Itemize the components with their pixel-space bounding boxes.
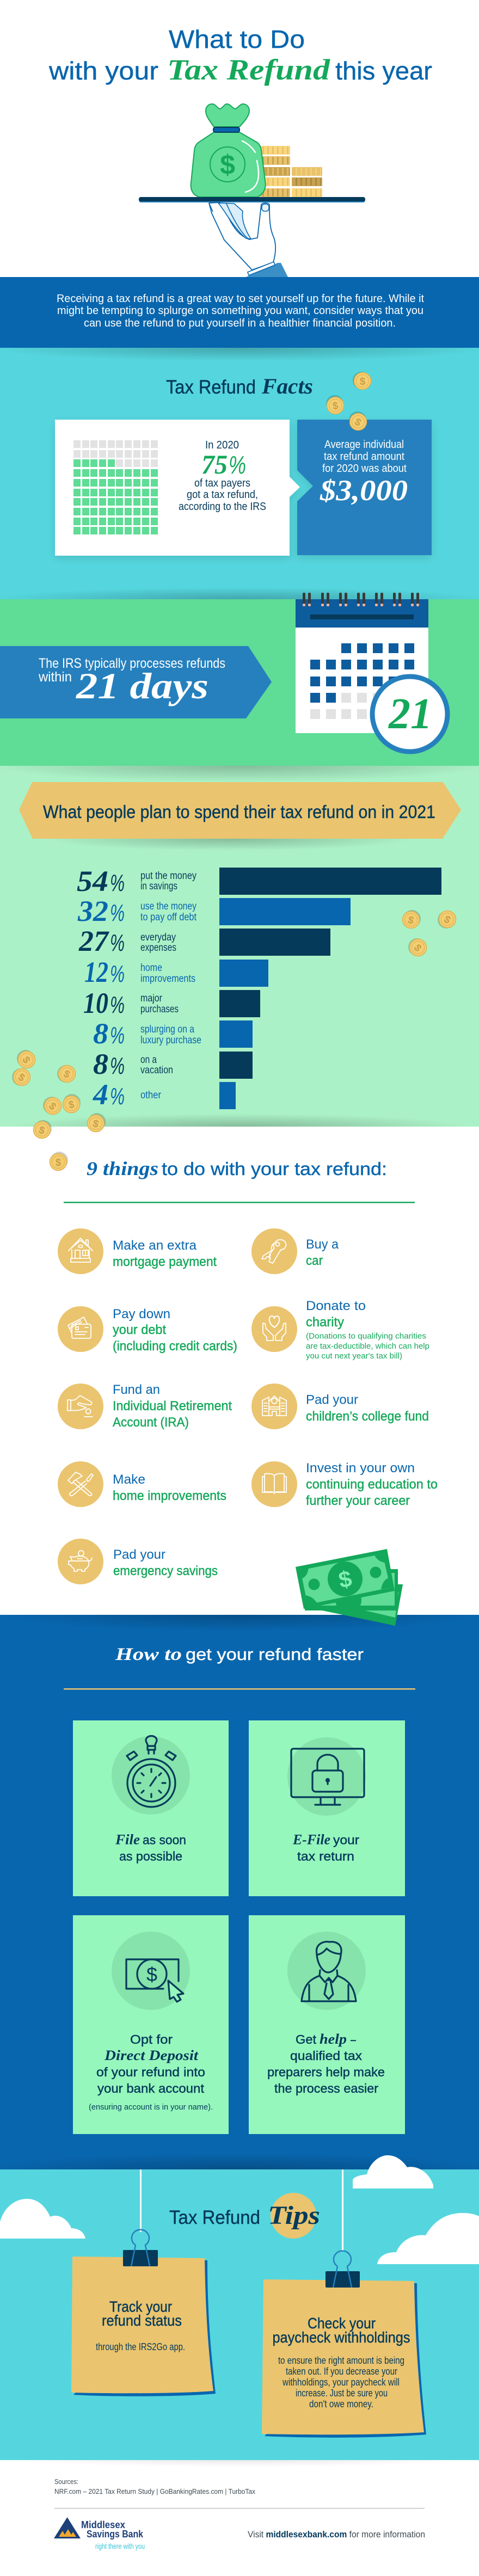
icon: coin <box>43 1097 61 1115</box>
logo: Middlesex Savings Bank: Savings Bank <box>87 2529 144 2540</box>
icon: coin <box>50 1152 68 1170</box>
icon: heart in hands <box>263 1316 286 1341</box>
heading: tax refund facts <box>166 374 313 398</box>
card: e-file <box>249 1720 405 1896</box>
text: direct deposit: Opt for <box>130 2032 173 2046</box>
item: college fund: Pad your <box>306 1392 358 1407</box>
bar row: 4 percent other: other <box>140 1089 161 1101</box>
icon: money bag <box>191 104 266 197</box>
icon: coin: $ <box>407 914 415 927</box>
icon: coin <box>63 1094 81 1112</box>
card: file as soon as possible <box>73 1720 229 1896</box>
icon: clouds <box>0 2155 479 2264</box>
bar row: 8 percent vacation: on a <box>140 1054 157 1066</box>
text block: 75 percent of tax payers: % <box>229 451 246 479</box>
bar row: 12 percent home: 12 <box>84 956 108 988</box>
bar chart: spending <box>77 865 441 1111</box>
icon: coin <box>87 1113 106 1132</box>
icon: calendar rings <box>303 593 419 606</box>
panel: tax refund facts <box>0 335 479 611</box>
logo: Middlesex Savings Bank: right there with you <box>95 2542 145 2550</box>
arrow banner: IRS processing <box>0 646 272 718</box>
item: buy a car: Buy a <box>306 1237 339 1252</box>
text block: average refund: tax refund amount <box>324 451 404 463</box>
panel: tax refund tips <box>0 2155 479 2460</box>
icon: coin: $ <box>411 942 424 954</box>
text: direct deposit: your bank account <box>97 2081 205 2095</box>
bar row: 10 percent major: major <box>140 992 162 1004</box>
icon: bill with cursor: $ <box>146 1963 157 1985</box>
note: track refund: through the IRS2Go app. <box>96 2341 185 2352</box>
text: e-file: E-File <box>292 1832 330 1847</box>
heading: tax refund tips: Tax Refund <box>169 2207 260 2228</box>
item: emergency savings: Pad your <box>113 1547 165 1562</box>
icon: coin: $ <box>352 416 363 429</box>
item: donate to charity: (Donations to qualifying charities <box>306 1331 426 1341</box>
heading: 9 things: to do with your tax refund: <box>162 1159 387 1179</box>
icon: dollar bills <box>296 1549 403 1626</box>
title <box>48 25 432 86</box>
icon: monitor with lock <box>291 1749 364 1805</box>
bar row: 32 percent debt: 32 <box>77 895 108 927</box>
text: direct deposit: (ensuring account is in your name). <box>89 2102 213 2112</box>
bar row: 27 percent everyday: 27 <box>78 925 109 957</box>
item: fund an IRA: Account (IRA) <box>113 1415 189 1430</box>
icon: coin: $ <box>91 1118 100 1130</box>
text: sources: Sources: <box>54 2477 78 2486</box>
text: sources: NRF.com – 2021 Tax Return Study | GoBankingRates.com | TurboTax <box>54 2487 255 2495</box>
panel: 9 things <box>58 1158 438 1584</box>
item: donate to charity <box>251 1299 429 1361</box>
icon: coin <box>17 1050 35 1068</box>
text: get help <box>267 2031 385 2095</box>
text block: 75 percent of tax payers: according to the IRS <box>179 501 266 513</box>
bar row: 27 percent everyday: everyday <box>140 931 176 943</box>
bar row: 32 percent debt <box>77 895 351 927</box>
text: visit website: Visit middlesexbank.com for more information <box>248 2529 425 2540</box>
item: college fund: children’s college fund <box>306 1409 429 1424</box>
heading: 9 things <box>87 1158 387 1179</box>
arrow banner: IRS processing: The IRS typically processes refunds <box>39 656 225 671</box>
heading: tax refund tips: Tips <box>268 2201 320 2230</box>
heading: how to: How to <box>115 1645 182 1664</box>
item: donate to charity: you cut next year's tax bill) <box>306 1351 402 1361</box>
icon: credit cards <box>68 1317 91 1338</box>
icon: coin <box>34 1120 52 1139</box>
text block: 75 percent of tax payers: got a tax refund, <box>187 489 258 501</box>
badge: 21: 21 <box>388 690 432 738</box>
bar row: 8 percent luxury: splurging on a <box>140 1023 194 1035</box>
text: e-file <box>292 1832 359 1864</box>
title: this year <box>335 57 432 85</box>
bar row: 10 percent major <box>83 987 260 1019</box>
item: emergency savings <box>58 1539 218 1584</box>
note: check withholdings <box>262 2169 426 2438</box>
icon: advisor <box>302 1942 356 2001</box>
text block: intro <box>57 293 424 329</box>
text block: 75 percent of tax payers: of tax payers <box>194 477 250 489</box>
text: get help: qualified tax <box>290 2049 363 2063</box>
text: e-file: your <box>333 1833 359 1847</box>
icon: hand <box>209 202 288 277</box>
bar row: 32 percent debt: % <box>110 900 125 926</box>
text block: average refund: Average individual <box>324 439 404 451</box>
item: home improvements: Make <box>113 1472 145 1487</box>
item: college fund <box>251 1384 429 1429</box>
bar row: 27 percent everyday: expenses <box>140 942 176 954</box>
icon: coin: $ <box>62 1068 72 1081</box>
bar row: 54 percent savings: in savings <box>140 880 177 892</box>
bar row: 54 percent savings: 54 <box>77 865 108 897</box>
text block: withholdings detail: don't owe money. <box>309 2399 373 2409</box>
icon: hammer and screwdriver <box>68 1472 93 1496</box>
bar row: 4 percent other: 4 <box>93 1078 108 1111</box>
bar row: 8 percent luxury: % <box>110 1022 125 1049</box>
badge: 21 <box>372 677 447 752</box>
text: sources <box>54 2477 255 2495</box>
item: fund an IRA <box>58 1382 232 1430</box>
bar row: 10 percent major: purchases <box>140 1003 179 1015</box>
item: buy a car: car <box>306 1253 323 1268</box>
note: track refund: Track your <box>109 2298 172 2315</box>
item: continuing education: continuing education to <box>306 1477 438 1492</box>
text: direct deposit: of your refund into <box>96 2065 205 2079</box>
text: direct deposit: Direct Deposit <box>104 2048 199 2063</box>
bar row: 12 percent home <box>84 956 268 988</box>
item: continuing education: further your career <box>306 1493 410 1508</box>
panel: spending plans <box>0 749 479 1140</box>
bar row: 8 percent vacation: 8 <box>93 1048 108 1080</box>
panel: 75 percent stat <box>55 420 300 556</box>
icon: front bill: $ <box>336 1565 354 1593</box>
item: pay down debt: (including credit cards) <box>113 1339 237 1354</box>
bar row: 8 percent vacation: % <box>110 1053 125 1079</box>
bar row: 8 percent luxury: luxury purchase <box>140 1034 201 1046</box>
icon: coin <box>353 372 371 390</box>
text block: withholdings detail: to ensure the right amount is being <box>278 2355 404 2366</box>
icon: coin: $ <box>56 1157 62 1169</box>
bar row: 32 percent debt: to pay off debt <box>140 911 196 923</box>
panel: intro text band <box>0 277 479 348</box>
icon: coin <box>349 411 367 430</box>
chart: waffle grid 75 of 100 <box>73 440 158 534</box>
bar row: 27 percent everyday: % <box>110 930 125 956</box>
text block: intro: Receiving a tax refund is a great way to set yourself up for the future. While it <box>57 293 424 305</box>
note: check withholdings: paycheck withholdings <box>272 2329 410 2346</box>
icon: bill with cursor <box>126 1959 183 2002</box>
item: donate to charity: Donate to <box>306 1299 366 1313</box>
bar row: 54 percent savings <box>77 865 441 897</box>
text block: average refund: $3,000 <box>320 474 408 507</box>
item: emergency savings: emergency savings <box>113 1564 218 1578</box>
item: pay down debt <box>58 1306 237 1354</box>
icon: coin: $ <box>46 1101 58 1113</box>
text: get help: help <box>320 2031 347 2047</box>
item: donate to charity: charity <box>306 1315 344 1330</box>
text: file as soon: as soon <box>143 1833 186 1847</box>
text: get help: Get <box>296 2032 317 2046</box>
text block: intro: can use the refund to put yourself in a healthier financial position. <box>84 317 396 329</box>
icon: house <box>69 1238 93 1262</box>
heading: 9 things: 9 things <box>87 1158 158 1179</box>
icon: coin: $ <box>332 400 339 413</box>
bar row: 8 percent luxury: 8 <box>93 1017 108 1050</box>
icon: calendar day squares <box>310 643 414 719</box>
panel: how to get refund faster <box>0 1599 479 2186</box>
heading: tax refund facts: Tax Refund <box>166 377 256 398</box>
icon: coin <box>326 395 344 414</box>
item: home improvements <box>58 1461 226 1507</box>
item: buy a car <box>251 1228 339 1274</box>
title: with your <box>48 57 158 85</box>
text block: 75 percent of tax payers <box>179 439 266 513</box>
heading: how to: get your refund faster <box>186 1645 364 1664</box>
icon: coin: $ <box>16 1072 27 1084</box>
icon: piggy bank <box>69 1551 92 1571</box>
icon: money bag: $ <box>220 150 235 180</box>
bar row: 4 percent other <box>93 1078 236 1111</box>
item: continuing education <box>251 1461 438 1508</box>
card: get help <box>249 1915 405 2134</box>
text: get help: the process easier <box>274 2081 378 2095</box>
logo: Middlesex Savings Bank <box>54 2517 145 2550</box>
panel: 21 days processing <box>0 593 479 766</box>
icon: tray <box>139 197 365 202</box>
text block: average refund: for 2020 was about <box>322 463 407 475</box>
text block: withholdings detail: increase. Just be sure you <box>296 2388 388 2399</box>
icon: falling coins <box>12 372 456 1170</box>
text: file as soon <box>115 1832 186 1864</box>
heading banner: what people plan <box>19 782 461 839</box>
icon: coin: $ <box>20 1055 33 1066</box>
note: check withholdings: Check your <box>308 2315 376 2332</box>
item: continuing education: Invest in your own <box>306 1461 415 1475</box>
bar row: 54 percent savings: put the money <box>140 870 196 882</box>
text: file as soon: as possible <box>119 1849 182 1864</box>
item: home improvements: home improvements <box>113 1489 226 1503</box>
text: get help: preparers help make <box>267 2065 385 2079</box>
arrow banner: IRS processing: within <box>38 669 72 685</box>
bar row: 8 percent luxury <box>93 1017 253 1050</box>
icon: coin: $ <box>38 1124 46 1137</box>
item: fund an IRA: Individual Retirement <box>113 1399 232 1413</box>
icon: binder clip <box>123 2230 158 2266</box>
bar row: 4 percent other: % <box>110 1083 125 1110</box>
icon: coin <box>403 910 421 929</box>
note: track refund <box>71 2169 216 2396</box>
bar row: 10 percent major: 10 <box>83 987 108 1019</box>
icon: calendar <box>296 593 447 752</box>
icon: coin <box>438 911 456 929</box>
icon: coin: $ <box>360 376 366 388</box>
panel: average refund amount <box>297 420 432 555</box>
icon: coin: $ <box>441 914 452 926</box>
item: pay down debt: Pay down <box>113 1307 170 1321</box>
icon: coin stacks <box>260 146 322 197</box>
heading: how to <box>115 1645 364 1664</box>
text block: withholdings detail <box>278 2355 404 2409</box>
text block: 75 percent of tax payers: 75 <box>201 449 228 479</box>
arrow banner: IRS processing: 21 days <box>76 665 208 706</box>
item: donate to charity: are tax-deductible, which can help <box>306 1342 429 1351</box>
bar row: 12 percent home: home <box>140 962 162 974</box>
icon: coin <box>408 938 427 956</box>
bar row: 10 percent major: % <box>110 992 125 1018</box>
title: What to Do <box>169 25 305 53</box>
bar row: 54 percent savings: % <box>110 870 125 896</box>
icon: coin <box>12 1068 30 1086</box>
panel: header <box>48 25 432 277</box>
item: extra mortgage payment <box>58 1228 217 1274</box>
bar row: 8 percent vacation <box>93 1048 253 1080</box>
icon: keys <box>262 1240 286 1263</box>
text block: intro: might be tempting to splurge on something you want, consider ways that you <box>57 305 423 317</box>
text: file as soon: File <box>115 1832 140 1847</box>
text block: average refund <box>320 439 408 507</box>
icon: coin: $ <box>68 1099 75 1111</box>
card: direct deposit <box>73 1915 229 2134</box>
bar row: 32 percent debt: use the money <box>140 900 196 912</box>
title: Tax Refund <box>167 53 330 86</box>
icon: front bill <box>296 1549 395 1609</box>
note: track refund: refund status <box>102 2312 182 2329</box>
icon: binder clip <box>326 2251 360 2288</box>
bar row: 12 percent home: improvements <box>140 973 195 985</box>
icon: school building <box>262 1396 286 1416</box>
heading: tax refund facts: Facts <box>261 374 313 398</box>
heading: tax refund tips <box>169 2193 320 2239</box>
item: extra mortgage payment: mortgage payment <box>113 1255 217 1269</box>
illustration: hand holding money bag on tray <box>139 104 365 277</box>
heading banner: what people plan: What people plan to spend their tax refund on in 2021 <box>43 802 435 822</box>
text: direct deposit <box>89 2032 213 2112</box>
panel: footer <box>54 2460 425 2550</box>
item: fund an IRA: Fund an <box>113 1382 160 1397</box>
bar row: 27 percent everyday <box>78 925 330 957</box>
icon: hand dropping coin <box>67 1395 93 1417</box>
text: get help: – <box>351 2032 356 2046</box>
item: extra mortgage payment: Make an extra <box>113 1238 197 1253</box>
icon: coin <box>57 1065 75 1083</box>
text: e-file: tax return <box>297 1849 354 1864</box>
bar row: 12 percent home: % <box>110 961 125 987</box>
icon: open book <box>262 1473 286 1493</box>
logo: Middlesex Savings Bank: Middlesex <box>81 2519 125 2530</box>
text block: withholdings detail: taken out. If you decrease your <box>286 2366 397 2377</box>
text block: 75 percent of tax payers: In 2020 <box>205 439 239 451</box>
bar row: 8 percent vacation: vacation <box>140 1064 173 1076</box>
text block: withholdings detail: withholdings, your paycheck will <box>282 2377 400 2388</box>
icon: stopwatch <box>127 1736 176 1807</box>
item: pay down debt: your debt <box>113 1323 166 1337</box>
